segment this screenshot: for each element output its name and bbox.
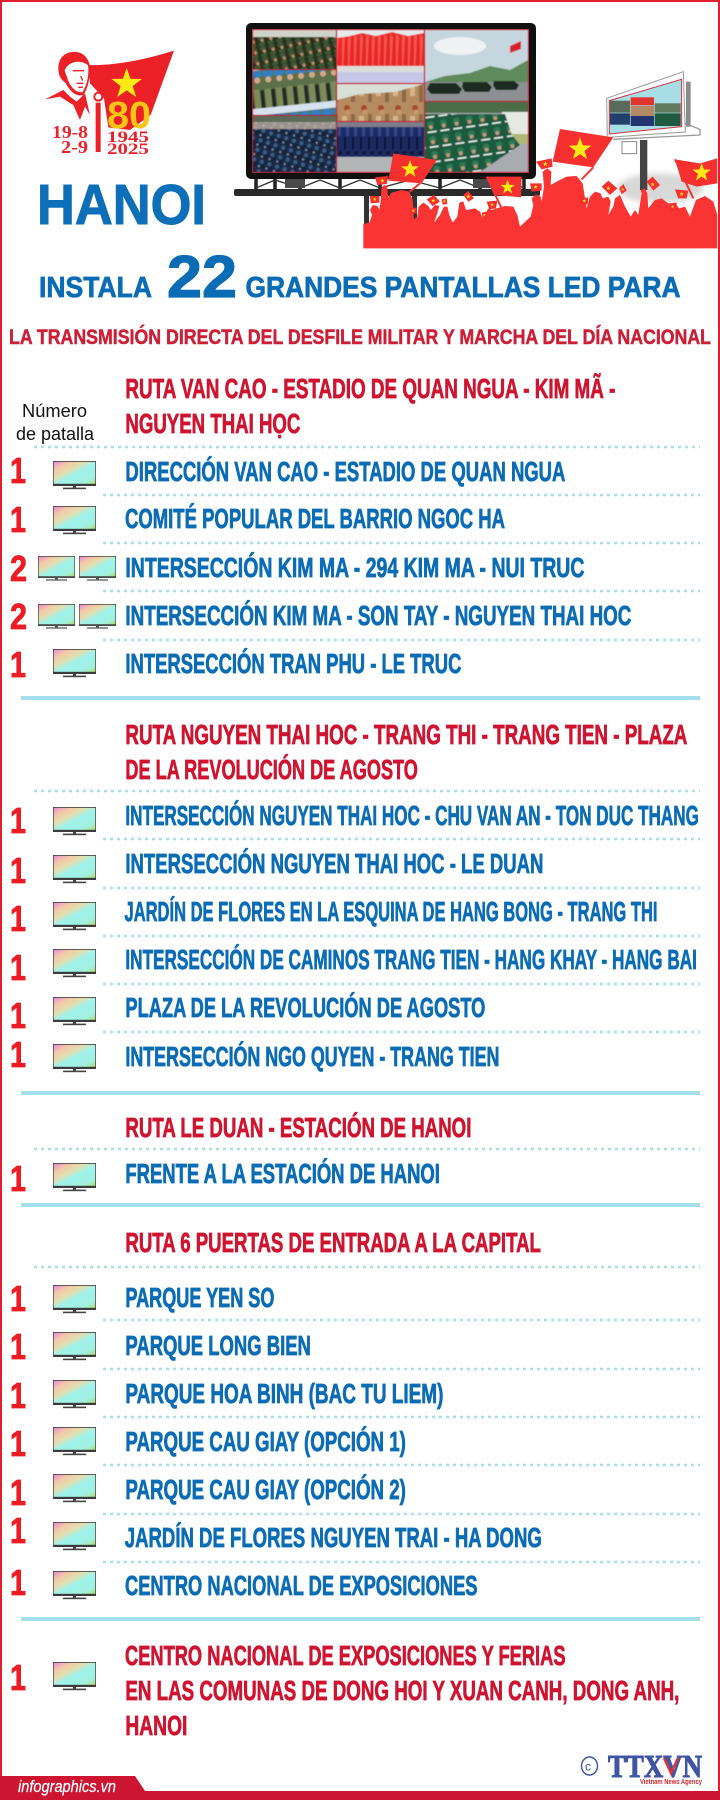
photo: red flags xyxy=(337,30,424,83)
row: Kim Ma - Nui Truc xyxy=(10,548,584,589)
agency logo: TTXVN: Vietnam News Agency xyxy=(640,1779,702,1786)
row: Centro Nacional: 1 xyxy=(10,1562,26,1603)
large flags xyxy=(388,129,717,197)
row: Hoa Binh: PARQUE HOA BINH (BAC TU LIEM) xyxy=(125,1378,443,1409)
row: Le Duan: 1 xyxy=(10,850,26,891)
section 5 text: HANOI xyxy=(125,1710,187,1741)
photo: dark blue troops xyxy=(337,122,424,172)
row: Ngo Quyen xyxy=(10,1034,499,1075)
row: Centro Nacional: CENTRO NACIONAL DE EXPOSICIONES xyxy=(125,1570,478,1601)
row: Ngoc Ha: COMITÉ POPULAR DEL BARRIO NGOC HA xyxy=(125,503,505,534)
headline word: instala: INSTALA xyxy=(39,272,152,304)
row: Yen So xyxy=(10,1278,274,1319)
small billboard shadow xyxy=(617,173,703,203)
agency logo: TTXVN: TTXVN xyxy=(608,1748,702,1784)
copyright mark: c xyxy=(585,1760,591,1774)
small billboard pole xyxy=(613,82,700,190)
row: Tran Phu: INTERSECCIÓN TRAN PHU - LE TRUC xyxy=(125,648,461,679)
photo mosaic xyxy=(253,30,528,172)
row: Kim Ma - Son Tay: 2 xyxy=(10,596,27,637)
row: Long Bien xyxy=(10,1326,311,1367)
flag poles xyxy=(410,159,693,208)
small flag stars xyxy=(373,161,684,216)
row: Cau Giay 2: PARQUE CAU GIAY (OPCIÓN 2) xyxy=(125,1474,406,1505)
row: Van Cao: 1 xyxy=(10,450,26,491)
row: Ngoc Ha: 1 xyxy=(10,499,26,540)
footer bar xyxy=(0,1776,720,1800)
small billboard xyxy=(607,72,703,203)
section 3 heading: RUTA LE DUAN - ESTACIÓN DE HANOI xyxy=(125,1112,471,1143)
logo dates xyxy=(52,122,149,158)
row: Kim Ma - Nui Truc: 2 xyxy=(10,548,27,589)
footer source: infographics.vn xyxy=(18,1777,116,1796)
row: Plaza xyxy=(10,992,485,1036)
logo number 80: 80 xyxy=(107,95,151,137)
copyright mark xyxy=(582,1757,598,1775)
row: Plaza: PLAZA DE LA REVOLUCIÓN DE AGOSTO xyxy=(125,992,485,1023)
row: Tran Phu xyxy=(10,644,461,685)
row: Ton Duc Thang xyxy=(10,800,699,841)
row: Estación de Hanoi: FRENTE A LA ESTACIÓN DE HANOI xyxy=(125,1158,440,1189)
section 2: ruta Nguyen Thai Hoc xyxy=(10,719,700,1075)
headline number: 22: 22 xyxy=(167,244,237,310)
photo: blue beret troops xyxy=(253,70,336,115)
row: Ngo Quyen: INTERSECCIÓN NGO QUYEN - TRANG TIEN xyxy=(125,1041,499,1072)
row: Trang Tien: 1 xyxy=(10,947,26,988)
small flags xyxy=(370,158,688,218)
row: Yen So: PARQUE YEN SO xyxy=(125,1282,274,1313)
crowd with flags xyxy=(363,129,717,248)
section 1: ruta Van Cao xyxy=(10,373,700,685)
row: Ngo Quyen: 1 xyxy=(10,1034,26,1075)
logo microphone xyxy=(94,93,102,152)
section 1 heading: NGUYEN THAI HỌC xyxy=(125,408,300,439)
title: HANOI: HANOI xyxy=(37,173,206,237)
headline words: grandes pantallas: GRANDES PANTALLAS LED PARA xyxy=(246,272,681,304)
logo dates: 2025 xyxy=(107,141,149,158)
row: Estación de Hanoi: 1 xyxy=(10,1158,26,1199)
row: Cau Giay 1: PARQUE CAU GIAY (OPCIÓN 1) xyxy=(125,1426,406,1457)
logo dates: 1945 xyxy=(107,129,149,146)
large flag stars xyxy=(401,137,711,194)
logo flag xyxy=(88,51,174,130)
section 3: ruta Le Duan xyxy=(10,1112,700,1199)
row: Ngoc Ha xyxy=(10,499,505,540)
small billboard panel xyxy=(607,72,685,137)
row: Nguyen Trai xyxy=(10,1510,542,1553)
row: Trang Tien xyxy=(10,944,697,988)
logo star xyxy=(111,68,142,97)
row: Tran Phu: 1 xyxy=(10,644,26,685)
row: Centro Nacional xyxy=(10,1562,478,1603)
row: Hoa Binh xyxy=(10,1375,443,1416)
row: Cau Giay 2: 1 xyxy=(10,1472,26,1513)
large billboard xyxy=(234,23,540,227)
section 5: centro nacional de exposiciones y ferias xyxy=(10,1640,679,1741)
row: Hoa Binh: 1 xyxy=(10,1375,26,1416)
row: Hang Bong: 1 xyxy=(10,898,26,939)
column label: número de patalla: Número xyxy=(22,401,87,421)
row: Cau Giay 2 xyxy=(10,1472,406,1513)
billboard stand xyxy=(234,178,540,227)
section 5 screen count: 1 xyxy=(10,1657,26,1698)
logo dates: 19-8 xyxy=(52,122,88,142)
section 1 heading xyxy=(125,373,615,439)
row: Estación de Hanoi xyxy=(10,1158,440,1199)
row: Hang Bong xyxy=(10,896,658,939)
section 5 screen icon xyxy=(53,1662,96,1690)
photo: navy troops xyxy=(253,116,336,172)
logo: 80th anniversary emblem xyxy=(45,51,174,152)
photo: green troops marching xyxy=(425,102,528,172)
photo: tan troops xyxy=(337,84,424,121)
row: Long Bien: PARQUE LONG BIEN xyxy=(125,1330,311,1361)
section 5 text xyxy=(125,1640,679,1741)
small billboard mosaic xyxy=(610,97,681,126)
photo: tanks xyxy=(425,30,528,101)
column label: número de patalla xyxy=(16,401,95,444)
section 4: ruta 6 puertas xyxy=(10,1227,700,1603)
row: Cau Giay 1: 1 xyxy=(10,1423,26,1464)
row: Plaza: 1 xyxy=(10,995,26,1036)
row: Van Cao xyxy=(10,450,565,491)
row: Cau Giay 1 xyxy=(10,1423,406,1464)
headline xyxy=(39,244,681,310)
row: Long Bien: 1 xyxy=(10,1326,26,1367)
row: Yen So: 1 xyxy=(10,1278,26,1319)
row: Nguyen Trai: 1 xyxy=(10,1510,26,1551)
logo portrait xyxy=(45,52,90,120)
row: Ton Duc Thang: 1 xyxy=(10,800,26,841)
column label: número de patalla: de patalla xyxy=(16,424,95,444)
logo dates: 2-9 xyxy=(61,137,88,157)
row: Le Duan xyxy=(10,848,543,891)
billboard frame xyxy=(246,23,536,179)
photo: green troops xyxy=(253,30,336,69)
crowd silhouette xyxy=(363,168,717,248)
section 2 heading: DE LA REVOLUCIÓN DE AGOSTO xyxy=(125,754,418,785)
row: Kim Ma - Son Tay xyxy=(10,596,631,637)
section 2 heading xyxy=(125,719,687,785)
